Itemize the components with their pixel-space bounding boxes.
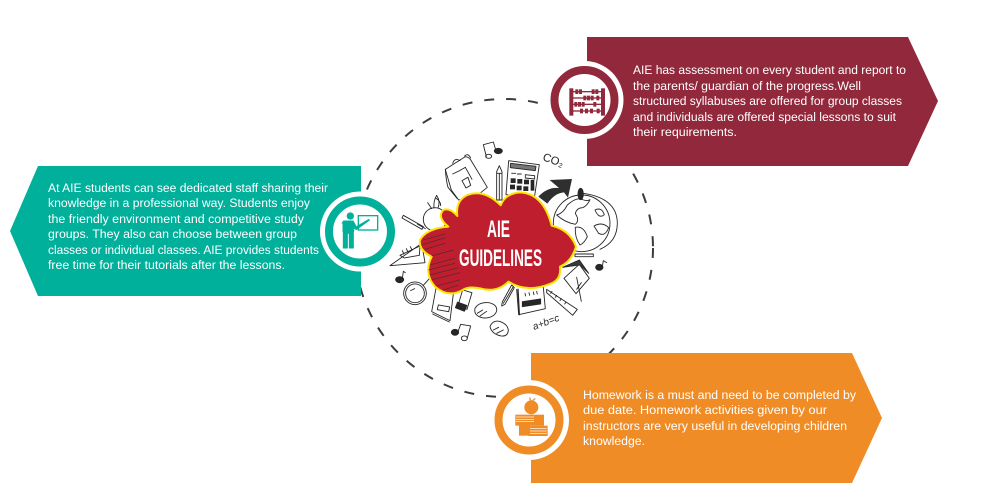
icon: apple <box>423 195 447 231</box>
icon: marker <box>456 290 472 311</box>
assessment text: the parents/ guardian of the progress.Well <box>633 79 861 93</box>
icon: backpack <box>445 155 487 200</box>
icon: pencil bottom <box>502 285 514 306</box>
cloud title: GUIDELINES <box>459 245 542 272</box>
icon: graduation cap <box>563 260 589 301</box>
assessment text: structured syllabuses are offered for group classes <box>633 94 902 108</box>
icon: eraser <box>475 303 497 318</box>
icon: pencil case and set square <box>390 215 425 266</box>
teaching staff text: knowledge in a professional way. Students enjoy <box>48 196 311 210</box>
assessment text: and individuals are offered special lessons to suit <box>633 110 897 124</box>
icon: pencil <box>497 166 502 200</box>
homework text: Homework is a must and need to be completed by <box>583 388 857 402</box>
icon: pebble <box>490 321 508 336</box>
icon: note left <box>396 271 405 283</box>
assessment text <box>633 63 906 139</box>
icon: books <box>432 288 453 322</box>
cloud: AIE guidelines <box>420 192 576 293</box>
panel: assessment <box>546 37 938 166</box>
assessment text: their requirements. <box>633 125 737 139</box>
assessment text: AIE has assessment on every student and report to <box>633 63 906 77</box>
homework text: knowledge. <box>583 434 645 448</box>
label: CO2: CO₂ <box>541 152 565 170</box>
icon: music note top <box>483 142 502 158</box>
icon: magnifier <box>404 278 430 305</box>
icon: music note bottom <box>451 324 471 341</box>
teaching staff text: classes or individual classes. AIE provides students <box>48 243 319 257</box>
icon: calculator <box>506 161 539 198</box>
illustration: school doodles <box>390 142 617 341</box>
panel: teaching staff <box>10 166 400 296</box>
teaching staff text <box>48 181 328 272</box>
cloud title: AIE <box>487 216 510 243</box>
homework text: instructors are very useful in developing children <box>583 419 847 433</box>
teaching staff text: At AIE students can see dedicated staff sharing their <box>48 181 328 195</box>
icon: globe <box>553 188 617 257</box>
icon: abacus badge <box>546 61 624 139</box>
icon: notebook <box>517 287 545 315</box>
teaching staff text: free time for their tutorials after the lessons. <box>48 258 285 272</box>
homework text: due date. Homework activities given by our <box>583 403 827 417</box>
homework text <box>583 388 857 448</box>
teaching staff text: the friendly environment and competitive study <box>48 212 305 226</box>
cloud title <box>459 216 542 272</box>
icon: note right <box>596 261 607 270</box>
teaching staff text: groups. They also can choose between group <box>48 227 297 241</box>
icon: ruler <box>547 289 577 315</box>
icon: curved arrow <box>538 179 572 204</box>
panel: homework <box>489 353 882 483</box>
label: a+b=c: a+b=c <box>531 313 561 333</box>
icon: teacher badge <box>320 192 400 272</box>
icon: apple on books badge <box>489 380 569 460</box>
